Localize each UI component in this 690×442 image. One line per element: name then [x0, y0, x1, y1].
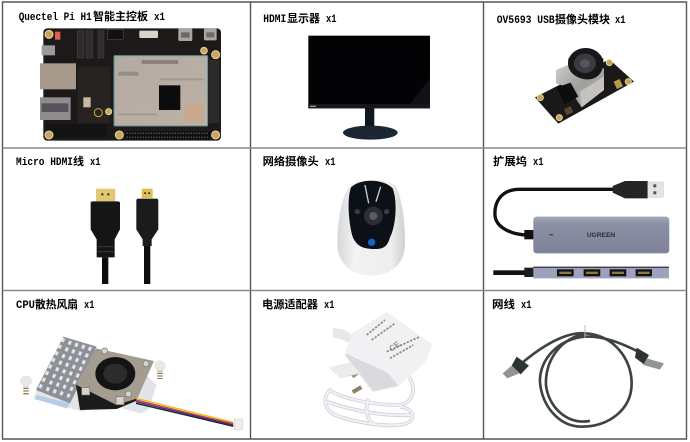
heading: HDMI monitor: HDMI	[263, 14, 286, 26]
heading: USB hub	[493, 154, 544, 169]
heading: power adapter: x1	[324, 300, 335, 312]
heading: Micro HDMI cable: x1	[90, 157, 101, 169]
heading: USB hub: 扩展坞	[493, 154, 527, 168]
heading: CPU fan	[16, 297, 95, 312]
heading: network cable	[492, 297, 532, 312]
icon: network camera	[337, 180, 405, 276]
icon: HDMI cable	[91, 189, 158, 284]
heading: main board: x1	[154, 12, 165, 24]
heading: main board: 智能主控板	[93, 9, 148, 23]
heading: camera module: x1	[615, 15, 626, 27]
icon: USB hub	[493, 181, 669, 278]
heading: network cable: x1	[521, 300, 532, 312]
heading: HDMI monitor	[263, 12, 337, 26]
panel: OV5693 USB camera module	[497, 12, 634, 124]
panel: USB hub dock	[493, 154, 669, 278]
heading: HDMI monitor: 显示器	[287, 12, 320, 25]
heading: Micro HDMI cable	[16, 154, 101, 169]
heading: camera module: 摄像头模块	[555, 12, 610, 26]
panel: HDMI monitor	[263, 12, 430, 140]
icon: power adapter: CE	[388, 340, 402, 353]
heading: CPU fan: 散热风扇	[35, 297, 78, 311]
heading: network cable: 网线	[492, 297, 515, 311]
icon: network cable	[503, 325, 664, 427]
heading: main board	[19, 9, 165, 24]
heading: network camera	[263, 154, 336, 169]
heading: power adapter: 电源适配器	[262, 297, 318, 311]
heading: camera module: OV5693 USB	[497, 15, 555, 27]
panel: network cable	[492, 297, 664, 427]
panel: CPU cooling fan	[16, 297, 243, 430]
icon: monitor	[308, 36, 430, 140]
heading: USB hub: x1	[533, 157, 544, 169]
heading: Micro HDMI cable: Micro HDMI	[16, 157, 73, 169]
heading: main board: Quectel Pi H1	[19, 12, 92, 24]
panel: power adapter	[262, 297, 430, 425]
heading: network camera: 网络摄像头	[263, 154, 319, 168]
icon: power adapter	[325, 314, 430, 425]
heading: camera module	[497, 12, 626, 27]
icon: CPU fan	[20, 337, 243, 430]
icon: circuit board	[40, 28, 221, 141]
icon: camera module	[535, 48, 634, 124]
heading: HDMI monitor: x1	[326, 14, 337, 26]
heading: CPU fan: x1	[84, 300, 95, 312]
panel: Quectel Pi H1 main board	[19, 9, 221, 141]
panel: Micro HDMI cable	[16, 154, 158, 284]
icon: USB hub: UGREEN	[587, 232, 615, 239]
panel: network camera	[263, 154, 405, 276]
heading: power adapter	[262, 297, 335, 312]
heading: CPU fan: CPU	[16, 300, 35, 312]
heading: Micro HDMI cable: 线	[73, 154, 84, 168]
heading: network camera: x1	[325, 157, 336, 169]
